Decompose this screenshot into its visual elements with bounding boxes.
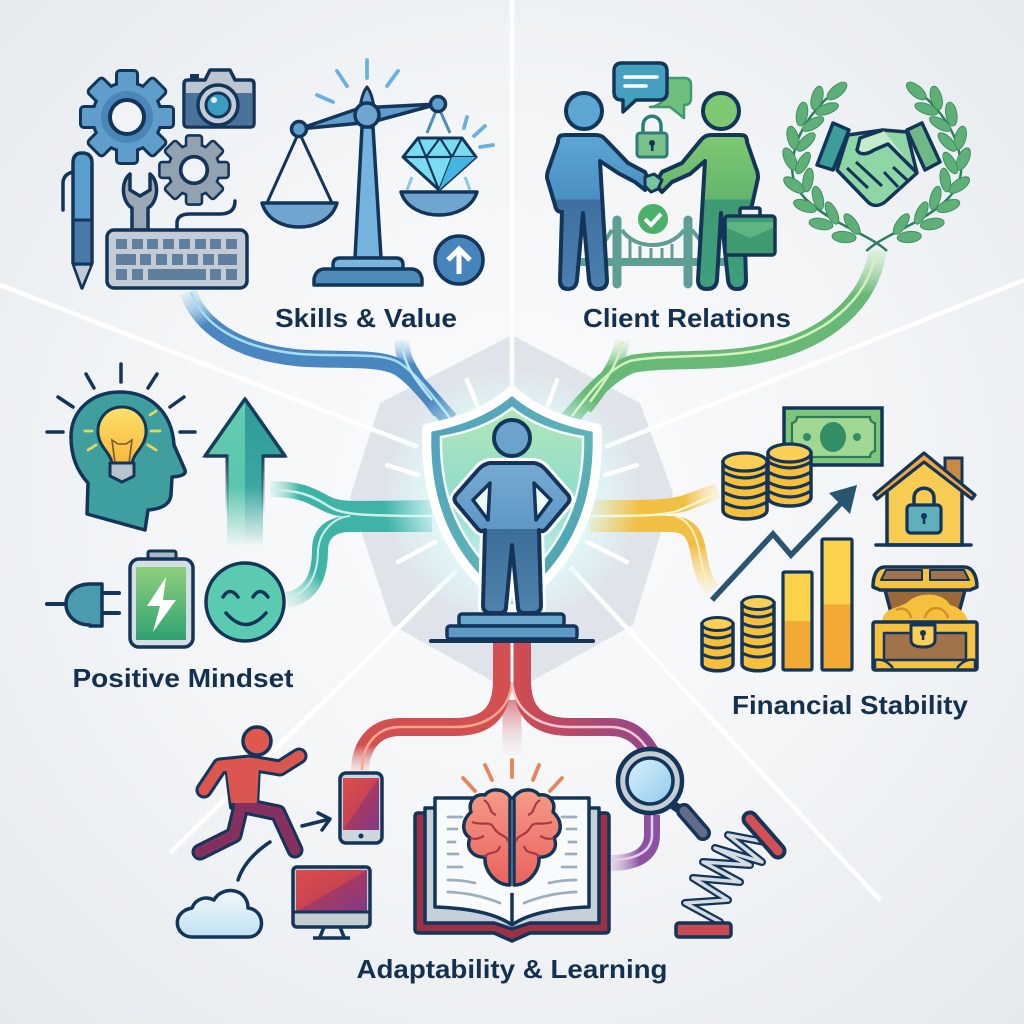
icon: spring (676, 819, 778, 937)
icon: running figure (200, 727, 299, 852)
label: Client Relations (583, 303, 791, 333)
connector: Adaptability & Learning (360, 640, 652, 863)
icon: laurel wreath (780, 79, 973, 251)
glow rays (387, 380, 637, 562)
icon: house (874, 453, 975, 545)
arm gaps (473, 483, 551, 520)
icon: balance scale (262, 87, 477, 285)
label: Skills & Value (275, 303, 457, 333)
glow (384, 369, 640, 625)
shield inner (441, 408, 583, 590)
icon: treasure chest (873, 567, 977, 670)
panel: Client Relations (547, 63, 973, 333)
connector: Positive Mindset (270, 489, 432, 600)
icon: coin stacks bottom (702, 596, 774, 671)
label: Positive Mindset (72, 663, 294, 693)
icon: pen (63, 153, 92, 288)
icon: brain (464, 790, 560, 885)
icon: phone (340, 773, 382, 843)
icon: smiley (206, 563, 284, 641)
person head (494, 420, 530, 456)
icon: sparkle lines (317, 60, 493, 147)
icon: green speech bubble (650, 78, 691, 118)
icon: magnifying glass (618, 749, 703, 833)
icon: monitor (293, 867, 370, 938)
connector: Financial Stability (590, 491, 718, 590)
shield (427, 390, 597, 610)
icon: coin stacks top (723, 444, 811, 519)
icon: trend arrow (712, 485, 857, 600)
connector: Skills & Value (188, 292, 450, 420)
icon: head with light bulb (71, 392, 185, 530)
icon: wrench (123, 174, 157, 230)
icon: diamond (403, 138, 476, 190)
icon: bridge (580, 220, 725, 284)
icon: up arrow (205, 399, 285, 545)
icon: cloud (177, 891, 262, 937)
icon: battery (130, 551, 193, 647)
icon: keyboard (107, 230, 247, 288)
icon: large gear (82, 72, 172, 162)
icon: open book (415, 798, 609, 941)
icon: camera (184, 70, 254, 127)
panel: Financial Stability (702, 408, 977, 720)
panel: Skills & Value (63, 60, 493, 333)
label: Financial Stability (732, 690, 969, 720)
label: Adaptability & Learning (356, 954, 668, 984)
icon: small gear (161, 137, 227, 203)
person outline (454, 463, 570, 613)
icon: curved arrow line (238, 842, 270, 880)
central hero: person on shield (384, 369, 640, 641)
icon: briefcase (725, 208, 775, 255)
icon: bar chart (783, 539, 852, 670)
icon: plug (47, 584, 119, 626)
icon: keyboard cable (177, 201, 235, 230)
icon: blue person (547, 93, 650, 289)
icon: green person (655, 93, 758, 289)
icon: banknote (784, 408, 882, 465)
icon: clasped hands (645, 174, 662, 192)
icon: bulb rays (47, 364, 195, 432)
icon: bulb (98, 407, 146, 463)
pedestal (431, 614, 593, 641)
person body (454, 463, 570, 613)
icon: arrow to phone (302, 813, 330, 830)
center octagon backdrop (350, 335, 673, 692)
icon: padlock (637, 116, 667, 157)
panel: Positive Mindset (47, 364, 294, 693)
icon: handshake (817, 123, 940, 205)
connector: Client Relations (568, 250, 878, 420)
icon: check badge (638, 204, 668, 234)
icon: up arrow circle (435, 236, 483, 284)
icon: blue speech bubble (614, 63, 667, 112)
panel: Adaptability & Learning (177, 727, 778, 984)
icon: brain sparks (463, 760, 562, 791)
